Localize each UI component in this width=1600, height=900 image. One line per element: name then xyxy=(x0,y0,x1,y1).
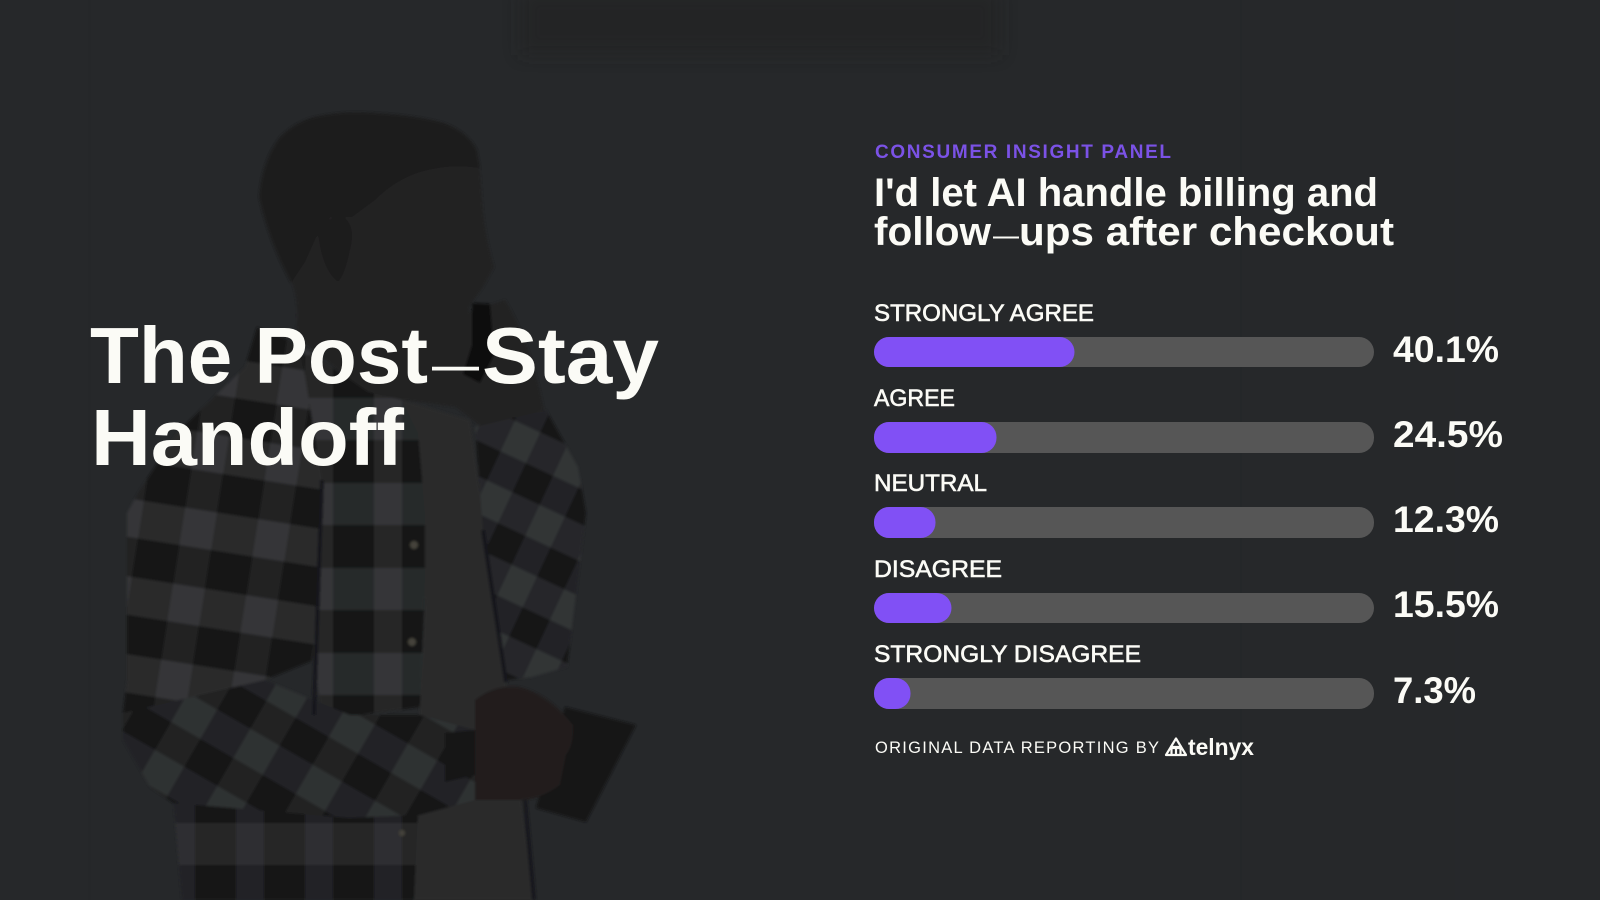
row: agree: 24.5% xyxy=(1393,414,1503,455)
icon: telnyx logo xyxy=(1166,738,1186,755)
upper sleeve xyxy=(123,327,322,713)
row: strongly agree: 40.1% xyxy=(1393,329,1499,370)
heading xyxy=(874,171,1394,254)
shirt edge xyxy=(483,530,534,900)
heading: I'd let AI handle billing and xyxy=(874,171,1378,215)
title: Stay xyxy=(482,311,660,400)
row: neutral: 12.3% xyxy=(1393,499,1499,540)
row: neutral xyxy=(874,470,1499,540)
right sleeve xyxy=(475,410,586,680)
panel: survey results xyxy=(874,142,1503,760)
buttons xyxy=(399,541,418,836)
title xyxy=(90,311,660,482)
forearm sleeve xyxy=(123,680,475,818)
eyebrow: CONSUMER INSIGHT PANEL xyxy=(875,142,1171,163)
heading: ups after checkout xyxy=(1019,210,1394,254)
footer credit: ORIGINAL DATA REPORTING BY xyxy=(875,739,1159,757)
row: disagree: DISAGREE xyxy=(874,556,1002,583)
phone xyxy=(463,303,494,383)
ear xyxy=(318,217,352,282)
row: agree xyxy=(874,385,1503,455)
t-shirt xyxy=(368,390,534,900)
title: — xyxy=(432,332,479,395)
hand holding mug xyxy=(475,687,573,800)
row: disagree xyxy=(874,556,1499,625)
row: strongly disagree: 7.3% xyxy=(1393,670,1476,711)
title: Handoff xyxy=(91,393,404,482)
neck and face xyxy=(291,150,494,407)
row: strongly disagree: STRONGLY DISAGREE xyxy=(874,641,1141,668)
row: agree: AGREE xyxy=(874,385,955,412)
row: neutral: NEUTRAL xyxy=(874,470,987,497)
row: strongly disagree xyxy=(874,641,1476,711)
lower shirt xyxy=(173,770,420,900)
title: The Post xyxy=(90,311,428,400)
wordmark: telnyx xyxy=(1188,734,1254,760)
heading: follow xyxy=(874,210,992,254)
photo: man on the phone holding a mug xyxy=(123,112,636,900)
hair xyxy=(259,112,480,283)
row: strongly agree xyxy=(874,300,1499,370)
shirt front xyxy=(300,345,425,720)
raised hand xyxy=(433,300,544,428)
mug xyxy=(536,707,636,822)
heading: — xyxy=(993,219,1019,252)
row: strongly agree: STRONGLY AGREE xyxy=(874,300,1094,327)
cuff xyxy=(445,730,475,782)
placket seam xyxy=(314,480,322,715)
footer credit xyxy=(875,734,1254,760)
row: disagree: 15.5% xyxy=(1393,584,1499,625)
